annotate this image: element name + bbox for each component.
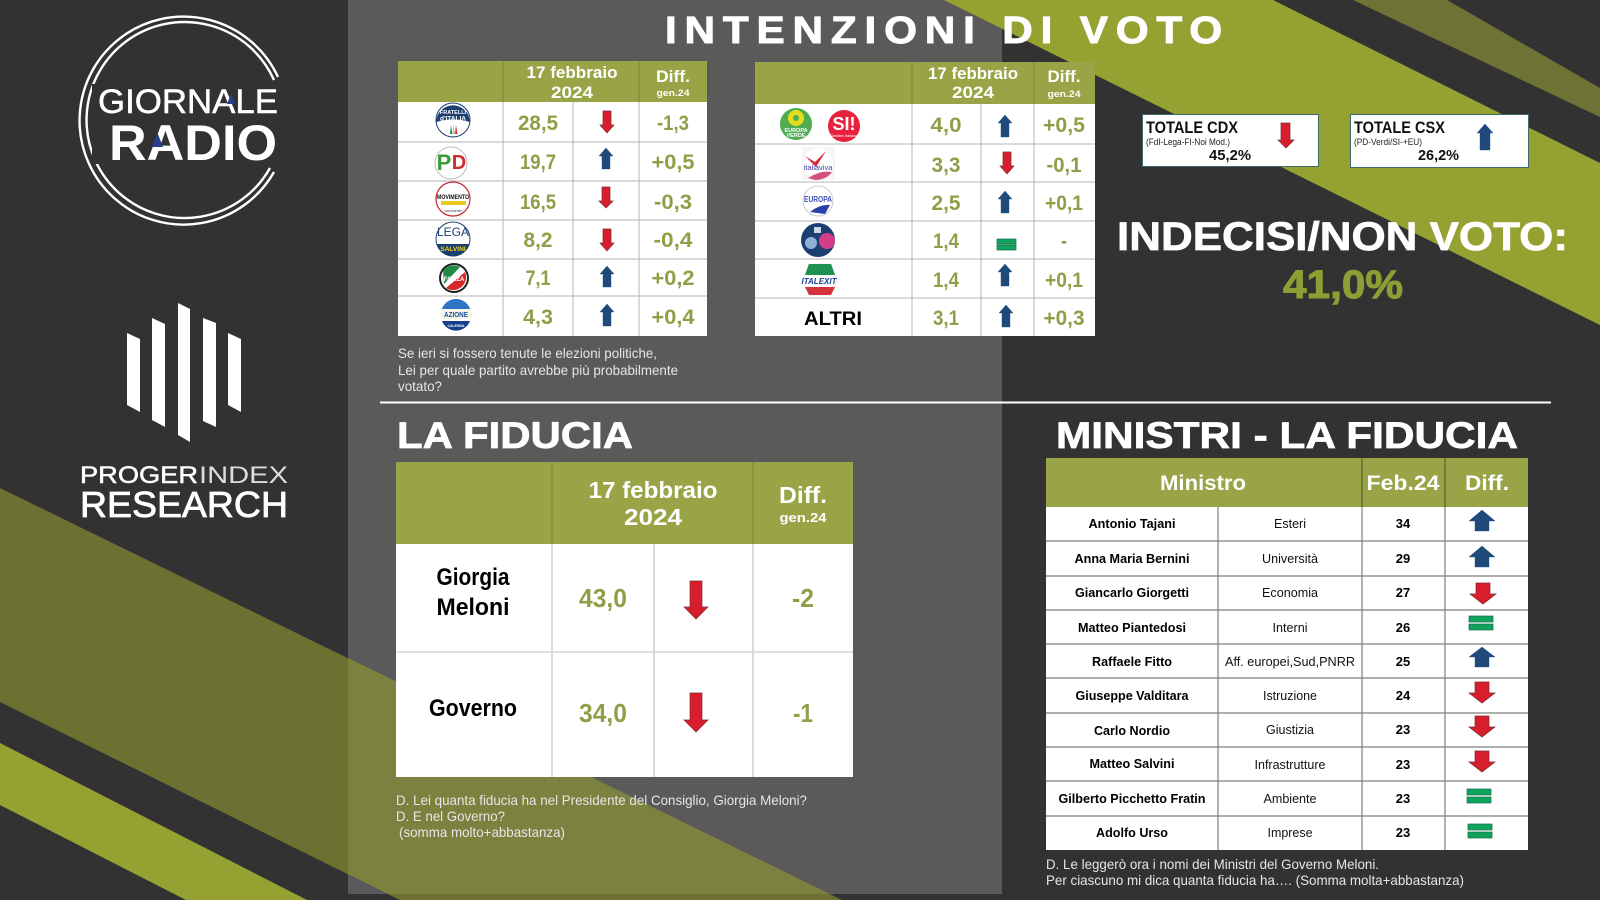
top-right main stripe — [944, 0, 1600, 325]
table: voting intentions right — [755, 62, 1095, 336]
logo: Partito Democratico: D — [452, 152, 466, 174]
callout: totale csx: TOTALE CSX — [1354, 118, 1446, 137]
minister portfolios: Aff. europei,Sud,PNRR — [1225, 654, 1355, 669]
table: voting intentions right: 2024 — [952, 83, 995, 102]
minister scores: 27 — [1396, 585, 1410, 600]
logo: Giornale Radio: RADIO — [109, 115, 277, 171]
question note: voting: Lei per quale partito avrebbe più probabilmente — [398, 362, 678, 378]
logo: Europa Verde: VERDE — [787, 133, 806, 139]
table: ministri — [1046, 458, 1528, 850]
top-right dim stripe — [1353, 0, 1600, 117]
row: Governo — [429, 693, 813, 732]
minister scores: 25 — [1396, 654, 1410, 669]
logo: Movimento 5 Stelle — [436, 182, 470, 216]
values right: - — [1061, 230, 1067, 253]
minister trend arrows — [1467, 510, 1496, 838]
values left: +0,5 — [652, 151, 695, 174]
table: ministri: Ministro — [1160, 472, 1246, 495]
values right: 3,1 — [933, 307, 959, 330]
table: voting intentions left — [398, 61, 707, 336]
minister portfolios: Istruzione — [1263, 688, 1317, 703]
row: Giorgia Meloni: Meloni — [436, 594, 510, 621]
callout: totale csx: 26,2% — [1418, 147, 1459, 164]
values left: +0,4 — [652, 306, 695, 329]
values left: +0,2 — [652, 267, 694, 290]
minister scores: 29 — [1396, 551, 1410, 566]
heading: la fiducia: LA FIDUCIA — [397, 415, 633, 456]
minister names: Adolfo Urso — [1096, 825, 1168, 840]
table: voting intentions right: 17 febbraio — [928, 64, 1018, 83]
bottom-left wide stripe — [0, 488, 842, 900]
logo: Movimento 5 Stelle: MOVIMENTO — [437, 195, 469, 201]
logo: Lega: SALVINI — [440, 246, 466, 253]
table: voting intentions left: 2024 — [551, 83, 594, 102]
logo: Giornale Radio — [80, 17, 282, 225]
callout: totale cdx — [1142, 114, 1318, 166]
callout: totale csx — [1350, 114, 1528, 168]
logo: Italexit — [802, 264, 838, 295]
row: Giorgia Meloni: Giorgia — [436, 564, 510, 591]
question note: ministri: Per ciascuno mi dica quanta fiducia ha…. (Somma molta+abbastanza) — [1046, 872, 1464, 888]
minister scores: 23 — [1396, 757, 1410, 772]
row: Giorgia Meloni: 43,0 — [579, 583, 627, 613]
logo: Italia Viva — [802, 147, 835, 180]
row: Giorgia Meloni — [436, 564, 814, 621]
logo: Forza Italia: FORZA — [444, 277, 465, 283]
logo: Noi Moderati — [801, 223, 835, 257]
minister names: Giuseppe Valditara — [1076, 688, 1189, 703]
minister scores: 34 — [1396, 516, 1411, 531]
logo: Giornale Radio: GIORNALE — [98, 83, 278, 121]
row: Governo: 34,0 — [579, 698, 627, 728]
table: voting intentions left: Diff. — [656, 67, 690, 86]
callout: totale cdx: TOTALE CDX — [1146, 118, 1239, 137]
minister scores: 23 — [1396, 791, 1410, 806]
logo: +Europa — [803, 186, 833, 216]
question note: ministri — [1046, 856, 1464, 888]
question note: voting: votato? — [398, 378, 442, 394]
minister names: Raffaele Fitto — [1092, 654, 1172, 669]
minister portfolios: Imprese — [1268, 825, 1312, 840]
values left: 19,7 — [520, 151, 556, 174]
logo: Proger Index Research: RESEARCH — [80, 484, 288, 525]
question note: voting — [398, 345, 678, 394]
row: Governo: Governo — [429, 695, 517, 722]
values right: +0,5 — [1043, 114, 1085, 137]
logo: Proger Index Research: INDEX — [199, 462, 288, 489]
minister names: Gilberto Picchetto Fratin — [1058, 791, 1206, 806]
logo: Fratelli d'Italia — [436, 103, 470, 137]
callout: totale cdx: (FdI-Lega-FI-Noi Mod.) — [1146, 137, 1230, 147]
minister portfolios: Economia — [1262, 585, 1319, 600]
row: Giorgia Meloni: -2 — [792, 583, 814, 613]
minister portfolios: Ambiente — [1264, 791, 1316, 806]
headline: indecisi: INDECISI/NON VOTO: — [1117, 215, 1568, 259]
minister names: Anna Maria Bernini — [1074, 551, 1190, 566]
table: la fiducia: Diff. — [779, 482, 827, 508]
values right: 2,5 — [932, 192, 961, 215]
logo: Azione: CALENDA — [447, 324, 465, 328]
table: voting intentions right: Diff. — [1048, 67, 1080, 86]
arrows left — [599, 111, 614, 326]
logo: Sinistra Italiana: Sinistra Italiana — [830, 133, 858, 138]
values right — [930, 114, 1085, 330]
table: voting intentions right: gen.24 — [1048, 89, 1081, 100]
question note: ministri: D. Le leggerò ora i nomi dei Ministri del Governo Meloni. — [1046, 856, 1379, 872]
question note: voting: Se ieri si fossero tenute le elezioni politiche, — [398, 345, 657, 361]
logo: Sinistra Italiana — [828, 110, 860, 142]
minister names — [1058, 516, 1206, 840]
values right: 4,0 — [930, 114, 962, 137]
logo: Partito Democratico — [435, 147, 467, 179]
logo: Italia Viva: italiaviva — [804, 163, 833, 172]
minister scores: 23 — [1396, 825, 1410, 840]
logo: Europa Verde — [780, 108, 812, 140]
table: la fiducia: 17 febbraio — [588, 477, 718, 503]
logo: Azione — [441, 299, 471, 331]
values left: -0,4 — [654, 229, 693, 252]
values right: 1,4 — [933, 230, 959, 253]
label: altri: ALTRI — [804, 309, 862, 330]
logo: +Europa: EUROPA — [804, 195, 832, 204]
callout: totale csx: (PD-Verdi/SI-+EU) — [1354, 137, 1422, 147]
minister scores: 26 — [1396, 620, 1410, 635]
minister scores — [1396, 516, 1411, 840]
minister scores: 24 — [1396, 688, 1411, 703]
values right: +0,3 — [1044, 307, 1084, 330]
values right: +0,1 — [1045, 269, 1083, 292]
table: ministri: Diff. — [1465, 472, 1509, 495]
table: la fiducia: gen.24 — [780, 510, 827, 525]
title: INTENZIONI DI VOTO — [665, 10, 1230, 52]
values left: -1,3 — [657, 112, 689, 135]
logo: Proger Index Research — [80, 303, 288, 525]
values right: +0,1 — [1045, 192, 1083, 215]
headline value: 41,0%: 41,0% — [1283, 263, 1403, 307]
minister names: Giancarlo Giorgetti — [1075, 585, 1189, 600]
values left: 28,5 — [518, 112, 558, 135]
logo: Italexit: ITALEXIT — [802, 277, 838, 286]
table: voting intentions left: gen.24 — [656, 88, 690, 99]
logo: Forza Italia — [439, 263, 469, 293]
minister portfolios: Giustizia — [1266, 722, 1315, 737]
logo: Sinistra Italiana: SI! — [832, 114, 856, 134]
minister portfolios: Infrastrutture — [1254, 757, 1326, 772]
logo: Proger Index Research: PROGER — [80, 462, 198, 489]
minister names: Matteo Piantedosi — [1078, 620, 1186, 635]
logo: Fratelli d'Italia: d'ITALIA — [440, 116, 466, 122]
table: la fiducia — [396, 462, 853, 777]
central grey panel — [348, 0, 1002, 894]
minister names: Carlo Nordio — [1094, 723, 1170, 738]
arrows right — [997, 115, 1016, 327]
values left — [518, 112, 695, 329]
table: voting intentions left: 17 febbraio — [526, 63, 618, 82]
logo: Lega — [436, 222, 470, 256]
table: la fiducia: 2024 — [624, 504, 682, 530]
question note: fiducia: D. E nel Governo? — [396, 808, 505, 824]
minister names: Matteo Salvini — [1090, 756, 1174, 771]
minister scores: 23 — [1396, 722, 1410, 737]
logo: Fratelli d'Italia: FRATELLI — [440, 110, 467, 116]
question note: fiducia: (somma molto+abbastanza) — [399, 824, 565, 840]
minister portfolios: Esteri — [1274, 516, 1306, 531]
table: ministri: Feb.24 — [1366, 472, 1440, 495]
values right: -0,1 — [1046, 154, 1082, 177]
callout: totale cdx: 45,2% — [1209, 147, 1251, 164]
logo: Azione: AZIONE — [444, 310, 468, 319]
minister names: Antonio Tajani — [1088, 516, 1176, 531]
values right: 1,4 — [933, 269, 959, 292]
minister portfolios — [1225, 516, 1355, 840]
values left: 16,5 — [520, 191, 556, 214]
row: Governo: -1 — [793, 698, 813, 728]
question note: fiducia — [396, 792, 807, 840]
logo: Movimento 5 Stelle: movimento — [444, 209, 462, 213]
values left: 8,2 — [524, 229, 552, 252]
logo: Europa Verde: EUROPA — [784, 128, 808, 134]
values left: 4,3 — [523, 306, 553, 329]
values left: 7,1 — [526, 267, 551, 290]
minister portfolios: Interni — [1272, 620, 1308, 635]
heading: ministri: MINISTRI - LA FIDUCIA — [1056, 415, 1518, 456]
logo: Lega: LEGA — [437, 225, 469, 239]
logo: Partito Democratico: P — [437, 150, 451, 175]
values right: 3,3 — [932, 154, 960, 177]
stripe seen through panel — [348, 658, 830, 894]
question note: fiducia: D. Lei quanta fiducia ha nel Presidente del Consiglio, Giorgia Meloni? — [396, 792, 807, 808]
minister portfolios: Università — [1262, 551, 1319, 566]
values left: -0,3 — [654, 191, 692, 214]
bottom-left bright stripe — [0, 743, 307, 900]
